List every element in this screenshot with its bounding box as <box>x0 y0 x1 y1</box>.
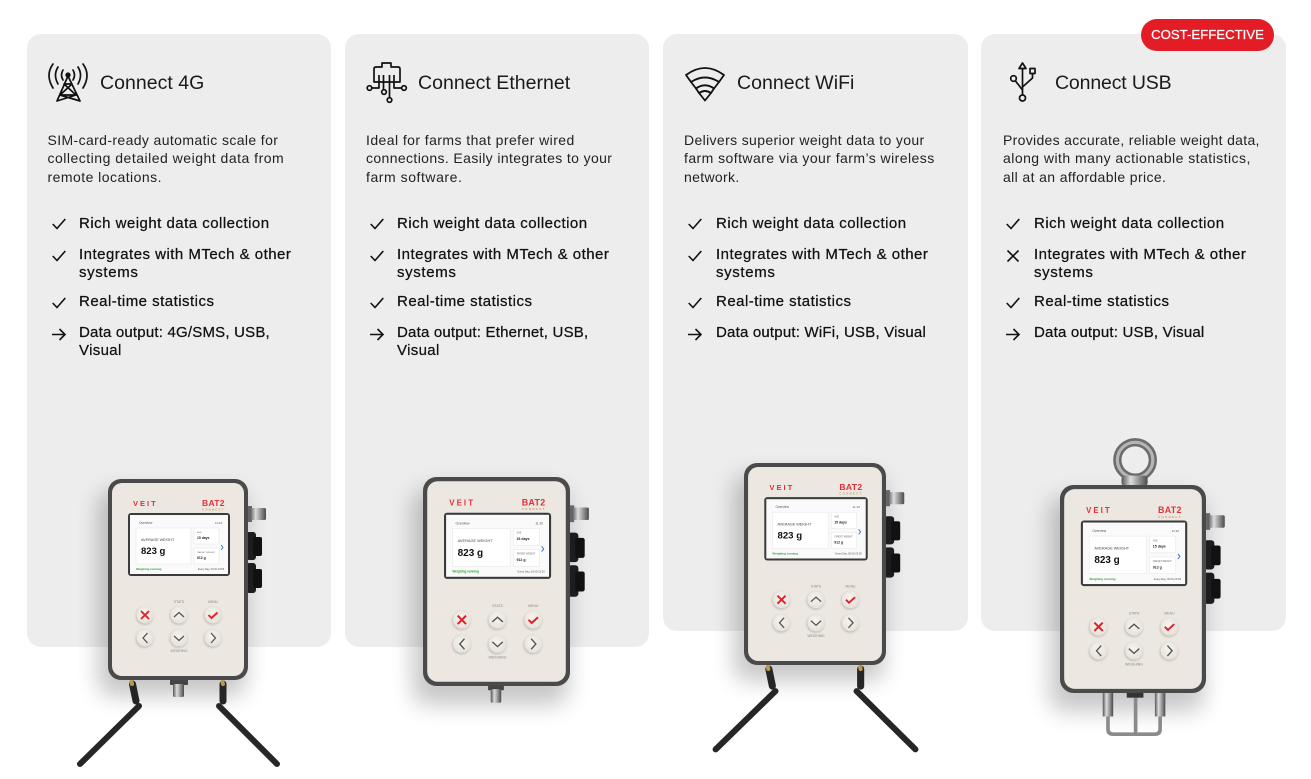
panel: Connect WiFi <box>663 34 968 631</box>
panel: Connect Ethernet <box>345 34 649 647</box>
screen: 823 g <box>777 530 802 541</box>
brand <box>1086 505 1182 519</box>
icon: usb <box>1010 62 1036 102</box>
feature text: Data output: 4G/SMS, USB, <box>79 324 270 341</box>
feature text: Data output: Ethernet, USB, <box>397 324 588 341</box>
screen: Overview <box>775 505 790 509</box>
feature text <box>716 246 928 281</box>
feature: check icon <box>52 250 66 262</box>
screen <box>764 497 868 560</box>
keypad: STATS <box>174 600 185 604</box>
feature text: systems <box>397 264 456 281</box>
screen: AGE <box>516 532 522 535</box>
keypad: WEIGHING <box>170 649 188 653</box>
screen: 15 days <box>516 537 530 541</box>
feature text <box>1034 246 1246 281</box>
feature text: Real-time statistics <box>1034 293 1169 310</box>
device: 4G scale with antennas <box>77 479 280 767</box>
brand <box>133 498 225 512</box>
screen: Every Day, 00:00-23:59 <box>835 552 862 555</box>
feature text: Integrates with MTech & other <box>79 246 291 263</box>
brand: VEIT <box>449 498 475 507</box>
icon: ethernet plug <box>366 62 408 104</box>
icon: wifi <box>685 67 725 102</box>
screen: 11:10 <box>1172 529 1179 533</box>
heading: Connect USB <box>1055 72 1172 94</box>
brand: BAT2 <box>202 498 225 508</box>
screen: TARGET WEIGHT <box>834 535 853 538</box>
brand: VEIT <box>133 499 158 508</box>
screen: Overview <box>1092 529 1107 533</box>
screen: 11:10 <box>535 521 543 525</box>
feature text: Rich weight data collection <box>397 215 588 232</box>
keypad <box>136 600 222 653</box>
keypad: STATS <box>492 604 504 608</box>
keypad: MENU <box>1164 611 1175 615</box>
device: USB scale with hanging ring <box>1038 438 1225 736</box>
antennas <box>716 667 915 749</box>
feature text <box>79 246 291 281</box>
antennas <box>80 682 277 764</box>
description: collecting detailed weight data from <box>48 150 284 166</box>
keypad: MENU <box>846 585 856 589</box>
panel: Connect USB <box>981 34 1286 631</box>
screen: TARGET WEIGHT <box>516 553 536 556</box>
feature text <box>396 324 588 359</box>
bottom connector <box>170 679 188 697</box>
screen: Weighing running <box>452 570 479 574</box>
side connectors <box>246 506 266 593</box>
screen: Every Day, 00:00-23:59 <box>198 568 225 571</box>
screen: Weighing running <box>136 567 162 571</box>
description <box>1003 132 1260 185</box>
screen <box>1081 520 1187 586</box>
panel: Connect 4G <box>27 34 331 647</box>
brand: CONNECT <box>202 508 225 512</box>
description: farm software via your farm’s wireless <box>684 150 935 166</box>
side connectors <box>884 490 904 578</box>
brand: BAT2 <box>839 482 862 492</box>
feature text: Data output: USB, Visual <box>1034 324 1204 341</box>
screen: 15 days <box>834 520 847 524</box>
screen: AGE <box>834 515 840 518</box>
screen: Every Day, 00:00-23:59 <box>1154 577 1181 581</box>
feature text: Integrates with MTech & other <box>397 246 609 263</box>
description: along with many actionable statistics, <box>1003 150 1251 166</box>
feature: arrow icon <box>1006 328 1020 341</box>
keypad <box>1089 611 1178 666</box>
badge: cost-effective <box>1141 19 1274 51</box>
description: Delivers superior weight data to your <box>684 132 925 148</box>
screen: 912 g <box>516 558 526 562</box>
keypad: WEIGHING <box>489 656 507 660</box>
feature text: Real-time statistics <box>79 293 214 310</box>
feature text: Rich weight data collection <box>716 215 907 232</box>
brand: CONNECT <box>1158 515 1182 519</box>
feature: check icon <box>52 218 66 230</box>
screen: AVERAGE WEIGHT <box>141 538 175 542</box>
screen: 823 g <box>1094 555 1120 566</box>
keypad: WEIGHING <box>807 634 825 638</box>
screen: Every Day, 00:00-23:59 <box>518 570 545 574</box>
heading: Connect Ethernet <box>418 72 570 94</box>
keypad: MENU <box>208 600 218 604</box>
screen: AVERAGE WEIGHT <box>777 522 812 526</box>
feature: check icon <box>1006 298 1020 309</box>
brand: CONNECT <box>839 492 863 496</box>
feature text: Rich weight data collection <box>1034 215 1225 232</box>
description: network. <box>684 169 740 185</box>
feature text: Integrates with MTech & other <box>716 246 928 263</box>
screen: AVERAGE WEIGHT <box>458 538 493 543</box>
description: all at an affordable price. <box>1003 169 1166 185</box>
feature text: systems <box>1034 264 1094 281</box>
heading: Connect WiFi <box>737 72 854 94</box>
feature text: Real-time statistics <box>397 293 532 310</box>
screen: 823 g <box>458 548 483 559</box>
feature: arrow icon <box>370 328 384 341</box>
feature text: Rich weight data collection <box>79 215 270 232</box>
screen: Weighing running <box>1089 577 1116 581</box>
screen: 912 g <box>1153 565 1162 569</box>
side connectors <box>568 505 589 597</box>
screen <box>444 513 551 579</box>
brand: BAT2 <box>1158 505 1182 515</box>
brand: VEIT <box>1086 506 1112 515</box>
screen: 823 g <box>141 546 165 557</box>
description <box>366 132 612 185</box>
device: Ethernet scale <box>402 477 589 716</box>
screen: AGE <box>1153 539 1158 542</box>
brand <box>449 497 546 511</box>
feature: arrow icon <box>688 328 702 341</box>
feature: check icon <box>370 298 384 309</box>
keypad <box>452 604 542 660</box>
screen: Weighing running <box>772 551 798 555</box>
bottom bracket <box>1103 690 1165 734</box>
feature text: systems <box>716 264 776 281</box>
description: SIM-card-ready automatic scale for <box>48 132 278 148</box>
feature: check icon <box>1006 218 1020 230</box>
screen: 11:10 <box>853 505 860 509</box>
badge: cost-effective: COST-EFFECTIVE <box>1151 27 1264 42</box>
screen: 15 days <box>197 536 210 540</box>
description <box>684 132 935 185</box>
description: farm software. <box>366 169 462 185</box>
keypad: STATS <box>811 585 822 589</box>
screen <box>128 513 230 576</box>
feature: check icon <box>688 298 702 309</box>
feature: check icon <box>370 250 384 262</box>
screen: 11:10 <box>215 521 223 525</box>
screen: Overview <box>456 521 470 525</box>
heading: Connect 4G <box>100 72 204 94</box>
description: remote locations. <box>48 169 162 185</box>
screen: 912 g <box>197 556 206 560</box>
keypad <box>772 585 859 638</box>
description: Provides accurate, reliable weight data, <box>1003 132 1260 148</box>
feature text: systems <box>79 264 138 281</box>
screen: Overview <box>139 521 153 525</box>
keypad: WEIGHING <box>1125 662 1143 666</box>
screen: TARGET WEIGHT <box>197 551 216 554</box>
brand: VEIT <box>769 483 794 492</box>
feature: check icon <box>688 250 702 262</box>
feature text <box>397 246 609 281</box>
feature: check icon <box>52 298 66 309</box>
icon: cell tower <box>48 63 88 102</box>
side connectors <box>1204 513 1225 604</box>
keypad: MENU <box>528 604 539 608</box>
feature text <box>78 324 270 359</box>
feature text: Visual <box>79 342 122 359</box>
screen: TARGET WEIGHT <box>1153 560 1172 563</box>
feature: cross icon <box>1007 250 1019 262</box>
feature text: Integrates with MTech & other <box>1034 246 1246 263</box>
feature text: Visual <box>397 342 440 359</box>
bottom connector <box>488 685 504 703</box>
keypad: STATS <box>1129 611 1140 615</box>
brand: CONNECT <box>522 507 546 511</box>
feature text: Real-time statistics <box>716 293 851 310</box>
description: connections. Easily integrates to your <box>366 150 612 166</box>
screen: AVERAGE WEIGHT <box>1094 547 1130 551</box>
description <box>48 132 284 185</box>
feature: check icon <box>688 218 702 230</box>
device: WiFi scale with antennas <box>712 463 918 752</box>
screen: 15 days <box>1153 545 1166 549</box>
brand: BAT2 <box>522 497 546 507</box>
brand <box>769 482 863 496</box>
feature: check icon <box>370 218 384 230</box>
hanging ring <box>1117 442 1153 486</box>
screen: AGE <box>197 531 202 534</box>
screen: 912 g <box>834 540 843 544</box>
feature text: Data output: WiFi, USB, Visual <box>716 324 926 341</box>
feature: arrow icon <box>52 328 66 341</box>
description: Ideal for farms that prefer wired <box>366 132 575 148</box>
